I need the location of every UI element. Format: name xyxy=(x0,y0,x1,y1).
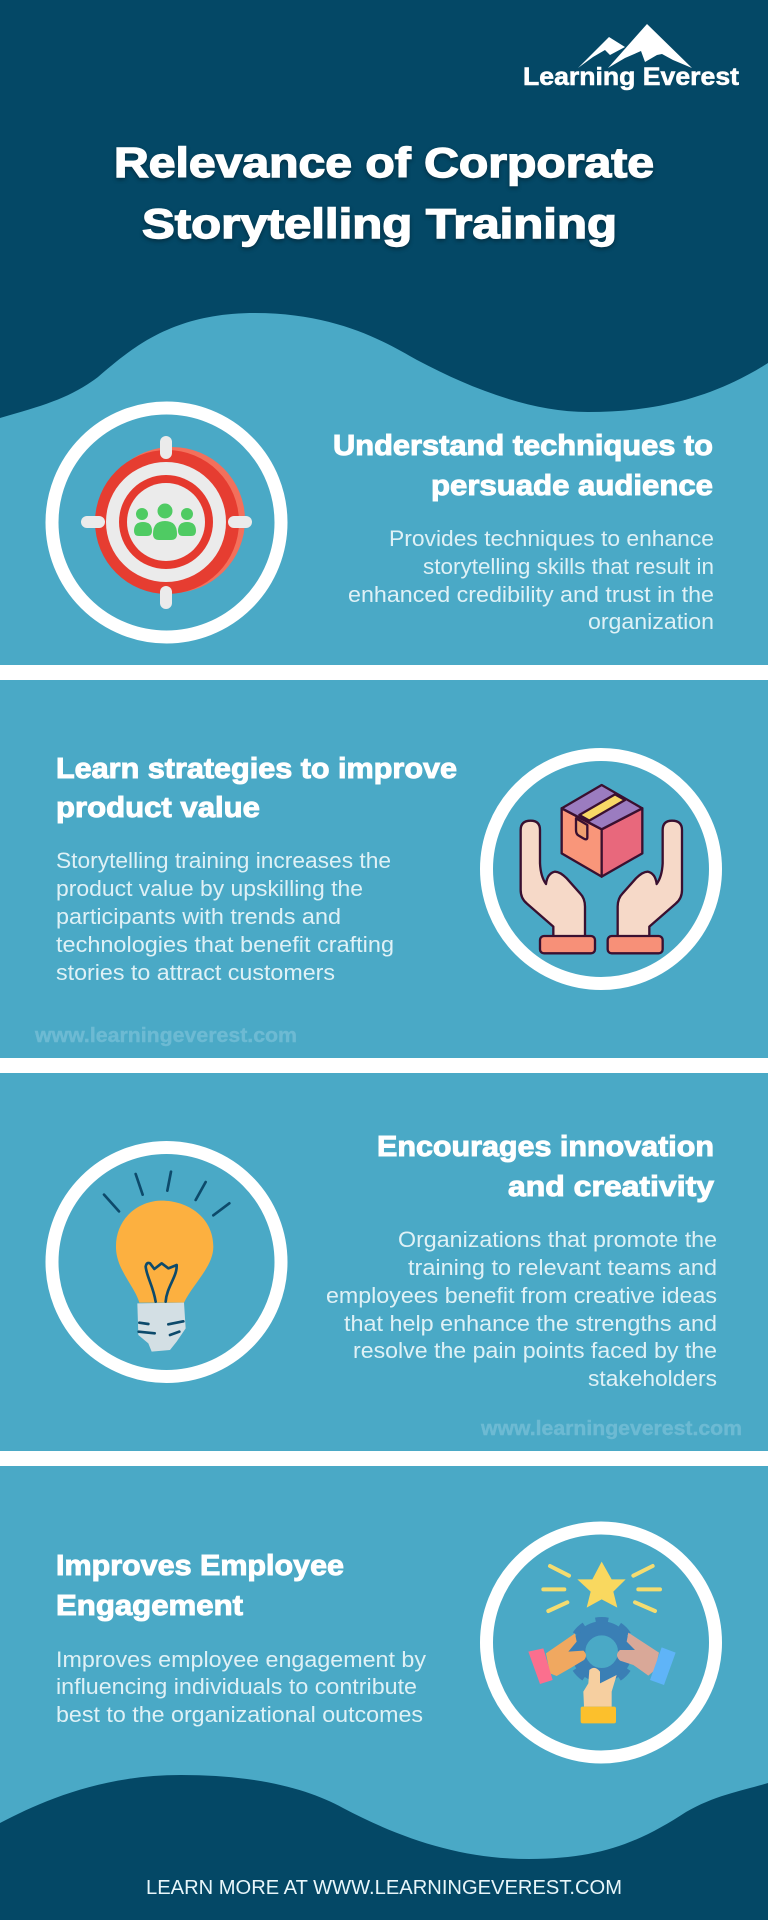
body text: participants with trends and xyxy=(56,904,341,929)
watermark: www.learningeverest.com xyxy=(480,1418,742,1440)
body text: enhanced credibility and trust in the xyxy=(348,582,714,607)
logo: Learning Everest: Learning Everest xyxy=(523,63,740,91)
body text: technologies that benefit crafting xyxy=(56,932,394,957)
heading xyxy=(333,430,713,502)
heading xyxy=(377,1131,714,1203)
heading: and creativity xyxy=(508,1171,714,1203)
body text: stories to attract customers xyxy=(56,960,335,985)
body text: Improves employee engagement by xyxy=(56,1647,426,1672)
heading: Engagement xyxy=(56,1590,243,1622)
title: Relevance of Corporate xyxy=(114,139,654,186)
body text: employees benefit from creative ideas xyxy=(326,1283,717,1308)
icon: hands holding box xyxy=(486,754,716,984)
heading: Understand techniques to xyxy=(333,430,713,462)
watermark: www.learningeverest.com xyxy=(34,1025,297,1047)
body text: resolve the pain points faced by the xyxy=(353,1338,717,1363)
heading: Encourages innovation xyxy=(377,1131,714,1163)
body text: storytelling skills that result in xyxy=(423,554,714,579)
body text: organization xyxy=(588,609,714,634)
body text xyxy=(56,1647,426,1727)
heading: Learn strategies to improve xyxy=(56,753,457,785)
panel: product value xyxy=(34,753,715,1047)
bottom dark wave footer xyxy=(0,1775,768,1920)
body text: best to the organizational outcomes xyxy=(56,1702,423,1727)
panel: innovation and creativity xyxy=(52,1131,742,1440)
panel: employee engagement xyxy=(56,1528,716,1757)
white band divider 2 xyxy=(0,1058,768,1073)
icon: light bulb xyxy=(52,1148,281,1376)
white band divider 3 xyxy=(0,1451,768,1466)
heading: Improves Employee xyxy=(56,1550,344,1582)
body text: Organizations that promote the xyxy=(398,1227,717,1252)
panel: persuade audience xyxy=(52,408,714,637)
icon: hands turning gear with star xyxy=(486,1528,716,1757)
body text: stakeholders xyxy=(588,1366,717,1391)
title xyxy=(114,139,654,247)
body text: training to relevant teams and xyxy=(408,1255,717,1280)
heading: product value xyxy=(56,792,260,824)
body text xyxy=(326,1227,717,1391)
heading: persuade audience xyxy=(431,470,713,502)
logo: Learning Everest xyxy=(523,24,740,91)
footer text: LEARN MORE AT WWW.LEARNINGEVEREST.COM xyxy=(146,1877,622,1899)
body text: product value by upskilling the xyxy=(56,876,363,901)
body text: that help enhance the strengths and xyxy=(344,1311,717,1336)
white band divider 1 xyxy=(0,665,768,680)
icon: target with people xyxy=(52,408,281,637)
body text xyxy=(348,526,714,634)
heading xyxy=(56,1550,344,1622)
title: Storytelling Training xyxy=(142,200,617,247)
body text: Provides techniques to enhance xyxy=(389,526,714,551)
body text: Storytelling training increases the xyxy=(56,848,391,873)
body text: influencing individuals to contribute xyxy=(56,1674,417,1699)
top dark wave header xyxy=(0,0,768,418)
heading xyxy=(56,753,457,824)
body text xyxy=(56,848,394,985)
